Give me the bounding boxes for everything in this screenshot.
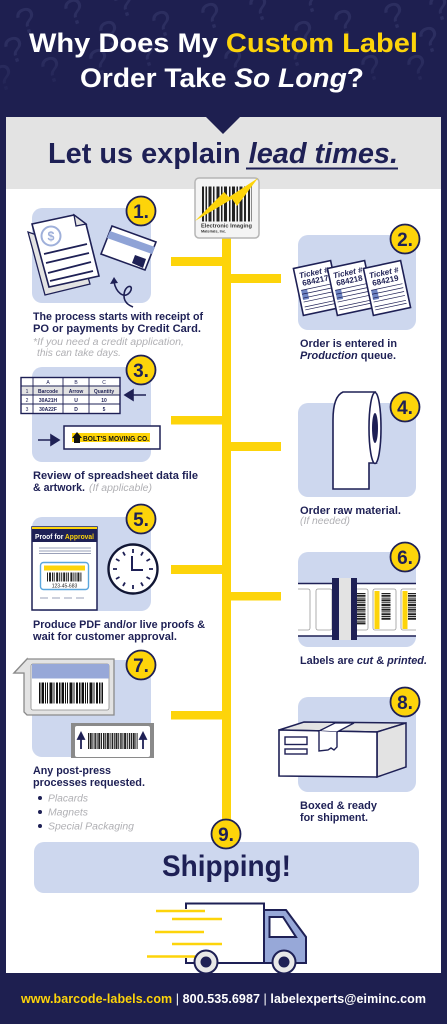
question mark background pattern: ?: [93, 11, 125, 56]
question mark background pattern: ?: [413, 17, 445, 62]
text: step 1: *If you need a credit application,: [33, 337, 184, 348]
text: step 3: [33, 470, 198, 494]
icon: spreadsheet: B: [74, 380, 78, 386]
question mark background pattern: [0, 0, 447, 100]
icon: proof document: Proof for Approval: [35, 532, 94, 541]
icon: label roll: [333, 392, 381, 489]
icon: squiggle arrow: [110, 277, 133, 307]
icon: spreadsheet: 3: [26, 407, 29, 413]
text: step 5: wait for customer approval.: [32, 631, 177, 643]
icon: artwork label: BOLT'S MOVING CO.: [83, 434, 149, 443]
panel: shipping banner: [34, 842, 419, 893]
question mark background pattern: ?: [146, 1, 178, 46]
list: post-press processes: [38, 794, 134, 832]
title: Order Take So Long?: [80, 63, 364, 93]
badge: 4: 4.: [397, 398, 413, 419]
timeline with branches: [171, 236, 281, 826]
badge: 8: [390, 688, 420, 716]
icon: tickets: 684219: [371, 273, 400, 288]
text: step 2: Production queue.: [300, 350, 396, 362]
text: step 8: for shipment.: [300, 812, 368, 824]
panel: step 3 spreadsheet review: [21, 367, 160, 462]
badge: 9: [212, 820, 240, 848]
icon: spreadsheet: 1: [26, 389, 29, 395]
icon: credit card: [101, 226, 156, 270]
icon: tickets: 684218: [335, 273, 364, 288]
text: step 2: Order is entered in: [300, 338, 397, 350]
text: step 7: [33, 765, 145, 789]
text: step 5: [32, 619, 205, 643]
text: step 6: Labels are cut & printed.: [300, 655, 427, 667]
icon: spreadsheet: A: [46, 380, 50, 386]
icon: spreadsheet: [21, 377, 120, 414]
badge: 1: 1.: [133, 202, 149, 223]
company logo: Electronic Imaging: [201, 224, 253, 230]
panel: step 1 receipt of PO: [28, 208, 156, 307]
question mark background pattern: ?: [288, 11, 320, 56]
panel: step 6 cut and printed: [298, 552, 416, 647]
question mark background pattern: ?: [35, 47, 67, 92]
badge: 9: 9.: [218, 825, 234, 846]
question mark background pattern: ?: [130, 31, 162, 76]
icon: spreadsheet: 30A22F: [39, 407, 57, 413]
question mark background pattern: ?: [401, 45, 433, 90]
badge: 3: 3.: [133, 361, 149, 382]
text: step 4: Order raw material.: [300, 505, 401, 517]
text: step 4: [300, 505, 401, 527]
badge: 6: [390, 542, 420, 572]
panel: step 8 boxed: [279, 697, 416, 792]
badge: 2: [390, 224, 420, 254]
text: step 7: processes requested.: [33, 777, 145, 789]
icon: shipping box: [279, 722, 406, 777]
icon: placard: [14, 659, 114, 715]
text: step 7: Any post-press: [33, 765, 111, 777]
subtitle band: [6, 117, 441, 189]
icon: spreadsheet: U: [74, 398, 78, 404]
question mark background pattern: ?: [83, 39, 115, 84]
text: step 3: Review of spreadsheet data file: [33, 470, 198, 482]
text: step 8: Boxed & ready: [300, 800, 378, 812]
icon: magnet label with arrows: [71, 723, 154, 758]
icon: tickets: Ticket #: [298, 265, 330, 280]
badge: 3: [126, 356, 156, 384]
panel: step 5 proofs: [32, 517, 158, 611]
text: step 1: The process starts with receipt of: [33, 311, 203, 323]
badge: 6: 6.: [397, 548, 413, 569]
panel: step 2 production queue: [293, 235, 416, 330]
list: post-press processes: Magnets: [48, 808, 88, 818]
icon: arrow to spreadsheet: [125, 390, 146, 400]
badge: 5: [126, 504, 156, 534]
title: [29, 28, 418, 93]
badge: 5: 5.: [133, 510, 149, 531]
question mark background pattern: ?: [218, 39, 250, 84]
icon: spreadsheet: Arrow: [69, 389, 83, 395]
icon: spreadsheet: 30A21H: [39, 398, 58, 404]
badge: 7: 7.: [133, 656, 149, 677]
badge: 7: [126, 650, 156, 680]
icon: proof document: 123-45-683: [52, 584, 78, 590]
text: step 5: Produce PDF and/or live proofs &: [33, 619, 205, 631]
icon: spreadsheet: Barcode: [38, 389, 58, 395]
question mark background pattern: ?: [278, 31, 310, 76]
text: step 3: & artwork.: [33, 482, 85, 494]
icon: spreadsheet: D: [74, 407, 78, 413]
icon: spreadsheet: C: [102, 380, 106, 386]
icon: proof document: [32, 527, 97, 610]
question mark background pattern: ?: [355, 45, 387, 90]
list: post-press processes: Special Packaging: [48, 822, 134, 832]
subtitle band: Let us explain lead times.: [48, 138, 398, 170]
badge: 1: [126, 196, 156, 226]
icon: tickets: Ticket #: [368, 265, 400, 280]
text: step 1: this can take days.: [37, 348, 121, 359]
icon: clock: [108, 544, 158, 594]
text: step 3: (If applicable): [89, 483, 152, 494]
icon: tickets: Ticket #: [332, 265, 364, 280]
panel: step 4 raw material: [298, 392, 416, 497]
icon: tickets: 684217: [301, 273, 330, 288]
panel: shipping banner: Shipping!: [162, 850, 291, 883]
panel: step 7 post-press: [14, 659, 154, 758]
badge: 2: 2.: [397, 230, 413, 251]
icon: spreadsheet: 5: [103, 407, 106, 413]
badge: 8: 8.: [397, 693, 413, 714]
list: post-press processes: Placards: [48, 794, 88, 804]
footer contact details: www.barcode-labels.com | 800.535.6987 | labelexperts@eiminc.com: [20, 992, 426, 1006]
footer bar: [0, 973, 447, 1024]
icon: spreadsheet: Quantity: [94, 389, 114, 395]
text: step 2: [300, 338, 397, 362]
icon: spreadsheet: 10: [101, 398, 107, 404]
icon: tickets: [293, 261, 411, 315]
icon: label strip: [298, 578, 416, 640]
text: step 1: [33, 311, 203, 359]
icon: delivery truck: [147, 904, 306, 974]
badge: 4: [390, 392, 420, 422]
text: step 1: PO or payments by Credit Card.: [33, 323, 201, 335]
icon: arrow to artwork: [38, 435, 59, 445]
text: step 8: [300, 800, 378, 824]
company logo: Materials, Inc.: [201, 230, 226, 234]
title: Why Does My Custom Label: [29, 28, 418, 58]
text: step 4: (If needed): [300, 516, 350, 527]
icon: spreadsheet: 2: [26, 398, 29, 404]
company logo: [195, 178, 259, 238]
question mark background pattern: ?: [328, 0, 360, 45]
icon: documents with dollar sign: $: [48, 230, 55, 244]
